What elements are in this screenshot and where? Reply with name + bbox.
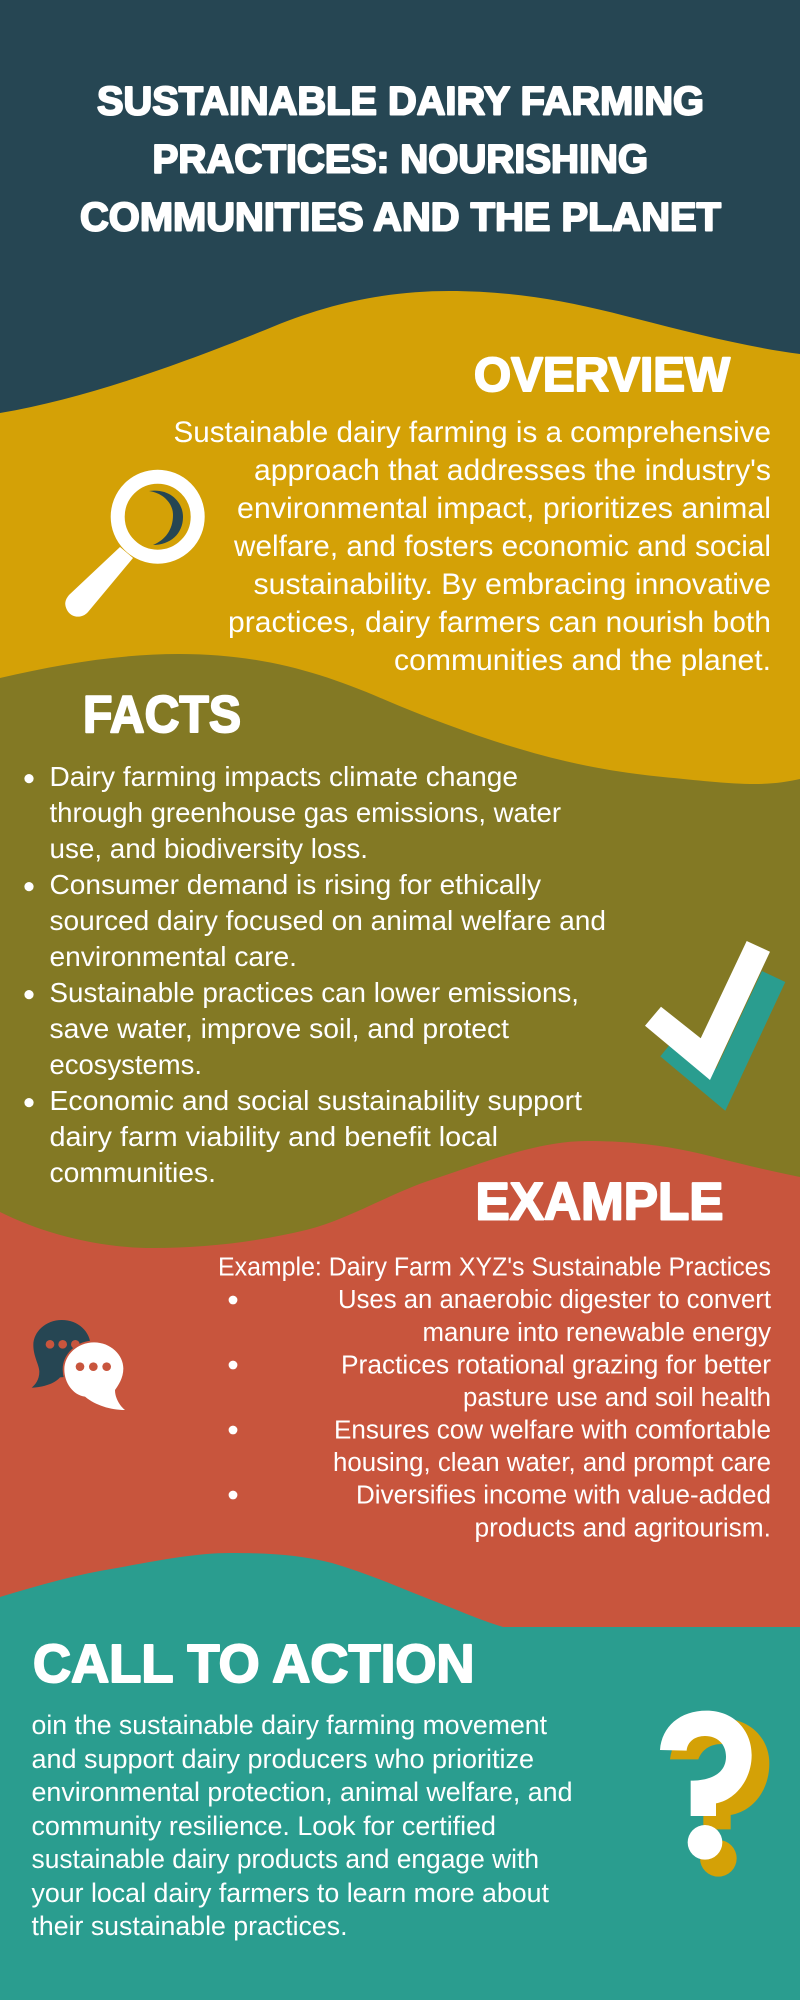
title: SUSTAINABLE DAIRY FARMING — [97, 80, 704, 124]
heading: call to action: CALL TO ACTION — [33, 1634, 474, 1694]
bullet list: example: Ensures cow welfare with comfortable — [334, 1416, 771, 1444]
bullet list: example: products and agritourism. — [474, 1514, 771, 1542]
icon: speech bubbles — [32, 1320, 125, 1410]
bullet list: example — [218, 1254, 772, 1542]
bullet list: example: Practices rotational grazing for better — [341, 1352, 772, 1380]
bullet list: example: Uses an anaerobic digester to convert — [338, 1286, 771, 1314]
heading: overview: OVERVIEW — [474, 349, 731, 402]
heading: facts: FACTS — [83, 686, 241, 744]
bullet list: facts: Dairy farming impacts climate change — [50, 761, 518, 792]
bullet list: example: Diversifies income with value-added — [356, 1482, 771, 1510]
text block: call to action body: community resilience. Look for certified — [32, 1811, 496, 1841]
title — [80, 80, 721, 240]
text block: overview body: communities and the planet. — [394, 644, 771, 677]
title: PRACTICES: NOURISHING — [152, 138, 648, 182]
text block: overview body: Sustainable dairy farming is a comprehensive — [174, 416, 771, 449]
bullet list: example: manure into renewable energy — [422, 1319, 771, 1347]
panel: call to action wave — [0, 1553, 800, 2000]
text block: call to action body: environmental protection, animal welfare, and — [32, 1777, 572, 1807]
text block: call to action body: sustainable dairy products and engage with — [32, 1844, 539, 1874]
text block: call to action body: and support dairy producers who prioritize — [32, 1744, 534, 1774]
bullet list: facts: ecosystems. — [50, 1049, 202, 1080]
bullet list: facts: communities. — [50, 1157, 216, 1188]
text block: overview body: practices, dairy farmers can nourish both — [228, 606, 771, 639]
bullet list: facts: environmental care. — [50, 941, 297, 972]
bullet list: facts: sourced dairy focused on animal welfare and — [50, 905, 606, 936]
text block: overview body: approach that addresses the industry's — [254, 454, 771, 487]
text block: call to action body: oin the sustainable dairy farming movement — [32, 1710, 548, 1740]
text block: call to action body: your local dairy farmers to learn more about — [32, 1878, 550, 1908]
heading: example: EXAMPLE — [476, 1172, 724, 1232]
bullet list: facts: through greenhouse gas emissions, water — [50, 797, 561, 828]
title: COMMUNITIES AND THE PLANET — [80, 196, 721, 240]
text block: call to action body: their sustainable practices. — [32, 1911, 348, 1941]
panel: facts wave — [0, 654, 800, 2000]
bullet list: facts: use, and biodiversity loss. — [50, 833, 368, 864]
icon: question mark — [660, 1711, 769, 1877]
bullet list: facts: Consumer demand is rising for ethically — [50, 869, 541, 900]
text block: overview body: sustainability. By embracing innovative — [254, 568, 771, 601]
panel: example wave — [0, 1141, 800, 2000]
bullet list: facts — [24, 761, 606, 1188]
text block: overview body: environmental impact, prioritizes animal — [237, 492, 771, 525]
bullet list: example: Example: Dairy Farm XYZ's Sustainable Practices — [218, 1254, 771, 1282]
icon: magnifying glass — [65, 477, 198, 617]
text block: overview body: welfare, and fosters economic and social — [233, 530, 771, 563]
bullet list: facts: dairy farm viability and benefit local — [50, 1121, 498, 1152]
bullet list: facts: save water, improve soil, and protect — [50, 1013, 509, 1044]
bullet list: example: pasture use and soil health — [463, 1384, 771, 1412]
text block: overview body — [174, 416, 771, 677]
bullet list: facts: Sustainable practices can lower emissions, — [50, 977, 579, 1008]
bullet list: example: housing, clean water, and prompt care — [333, 1449, 771, 1477]
bullet list: facts: Economic and social sustainability support — [50, 1085, 582, 1116]
icon: check mark — [645, 941, 785, 1111]
text block: call to action body — [32, 1710, 572, 1941]
